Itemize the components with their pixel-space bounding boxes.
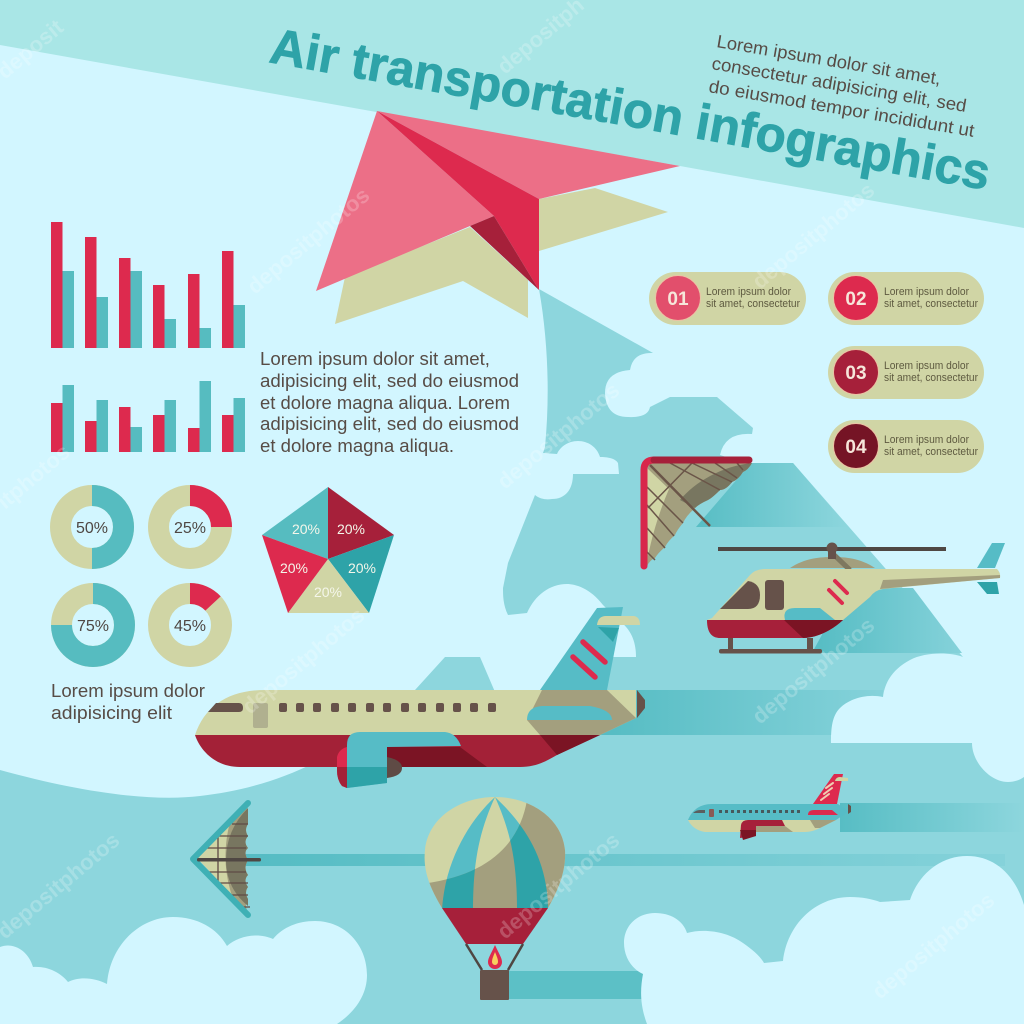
- option pill 03: Lorem ipsum dolor: [884, 360, 969, 372]
- ropes: [466, 944, 523, 970]
- main text block: et dolore magna aliqua.: [260, 435, 454, 456]
- icon: large hang glider: [644, 460, 752, 566]
- wing: [740, 820, 785, 838]
- option pill 02: [828, 272, 984, 325]
- pentagon chart: [262, 487, 394, 613]
- bar chart: top: [51, 222, 245, 348]
- donut chart: 25%: [158, 496, 222, 558]
- icon: hot air balloon: [420, 790, 570, 1000]
- plane wings: [316, 111, 680, 291]
- paper plane: [316, 111, 680, 324]
- flame: [488, 945, 502, 969]
- cloud: right: [831, 696, 905, 743]
- envelope: [424, 797, 566, 908]
- lower hull: [707, 620, 843, 638]
- option pill 01: 01: [667, 289, 689, 310]
- donut chart: 50%: [60, 496, 124, 558]
- caption under donuts: adipisicing elit: [51, 702, 172, 723]
- cabin windows: [279, 703, 496, 712]
- caption under donuts: [51, 680, 205, 723]
- option pill 03: [828, 346, 984, 399]
- header banner band: [0, 0, 1024, 228]
- donut chart: 75%: [62, 594, 125, 656]
- cabin windows: [719, 810, 800, 813]
- donut chart: 45%: [158, 594, 222, 656]
- main text block: Lorem ipsum dolor sit amet,: [260, 348, 490, 369]
- bar chart: bottom: [51, 381, 245, 452]
- caption under donuts: Lorem ipsum dolor: [51, 680, 205, 701]
- main text block: [260, 348, 519, 456]
- watermarks: depositphotos: [492, 827, 624, 944]
- icon: small airliner: [688, 774, 851, 840]
- option pill 01: Lorem ipsum dolor: [706, 286, 791, 298]
- door: [253, 703, 268, 728]
- plane shadow wings: [335, 188, 668, 324]
- cloud: bottom right: [624, 856, 1024, 1024]
- burner band: [442, 908, 548, 944]
- intro text block: Lorem ipsum dolor sit amet,: [715, 31, 942, 89]
- watermarks: depositphotos: [242, 182, 374, 299]
- watermarks: depositphotos: [237, 602, 369, 719]
- stabiliser: [527, 706, 612, 720]
- fuselage shade: [527, 690, 636, 735]
- flight trails: [245, 463, 1024, 999]
- option pill 01: sit amet, consectetur: [706, 298, 800, 310]
- donut chart: 50%: 50%: [76, 520, 108, 537]
- pentagon chart: 20%: [292, 521, 320, 537]
- main text block: et dolore magna aliqua. Lorem: [260, 392, 510, 413]
- skids: [728, 638, 813, 650]
- donut chart: 75%: 75%: [77, 618, 109, 635]
- tail fin: [540, 607, 623, 690]
- option pill 03: sit amet, consectetur: [884, 372, 978, 384]
- watermarks: depositphotos: [747, 612, 879, 729]
- donut chart: 25%: 25%: [174, 520, 206, 537]
- option pill 01: [649, 272, 806, 325]
- option pill 02: 02: [845, 289, 867, 310]
- option pill 03: 03: [845, 363, 867, 384]
- rotor: [718, 542, 946, 570]
- teal sky region with cloud silhouettes: [0, 289, 1024, 1024]
- cloud: bottom left: [0, 917, 367, 1024]
- watermarks: depositphotos: [492, 377, 624, 494]
- main text block: adipisicing elit, sed do eiusmod: [260, 413, 519, 434]
- icon: helicopter: [707, 542, 1005, 654]
- option pill 02: Lorem ipsum dolor: [884, 286, 969, 298]
- plane fold: [377, 111, 539, 290]
- option pill 02: sit amet, consectetur: [884, 298, 978, 310]
- main text block: adipisicing elit, sed do eiusmod: [260, 370, 519, 391]
- pentagon chart: 20%: [348, 560, 376, 576]
- engine and wing: [337, 732, 461, 788]
- option pill 04: 04: [845, 437, 867, 458]
- title: Air transportation infographics: [266, 18, 995, 201]
- pentagon chart: 20%: [337, 521, 365, 537]
- intro text block: [707, 31, 976, 141]
- fuselage: [195, 690, 636, 735]
- watermarks: depositphotos: [867, 887, 999, 1004]
- icon: airliner: [195, 607, 645, 788]
- option pill 04: Lorem ipsum dolor: [884, 434, 969, 446]
- pentagon chart: 20%: [280, 560, 308, 576]
- tail cap: [637, 690, 645, 718]
- tail fins: [977, 543, 1005, 568]
- cockpit windows: [720, 581, 760, 609]
- fuselage: [688, 804, 848, 820]
- fuselage: [707, 569, 1000, 620]
- pentagon chart: 20%: [314, 584, 342, 600]
- donut chart: 45%: 45%: [174, 618, 206, 635]
- cockpit window: [208, 703, 243, 712]
- option pill 04: sit amet, consectetur: [884, 446, 978, 458]
- basket: [480, 970, 509, 1000]
- icon: small hang glider: [193, 803, 261, 915]
- watermarks: depositphotos: [747, 177, 879, 294]
- tail fin: [813, 774, 843, 804]
- fuselage stripes: [829, 581, 847, 603]
- intro text block: do eiusmod tempor incididunt ut: [707, 76, 976, 141]
- option pill 04: [828, 420, 984, 473]
- intro text block: consectetur adipisicing elit, sed: [710, 53, 968, 116]
